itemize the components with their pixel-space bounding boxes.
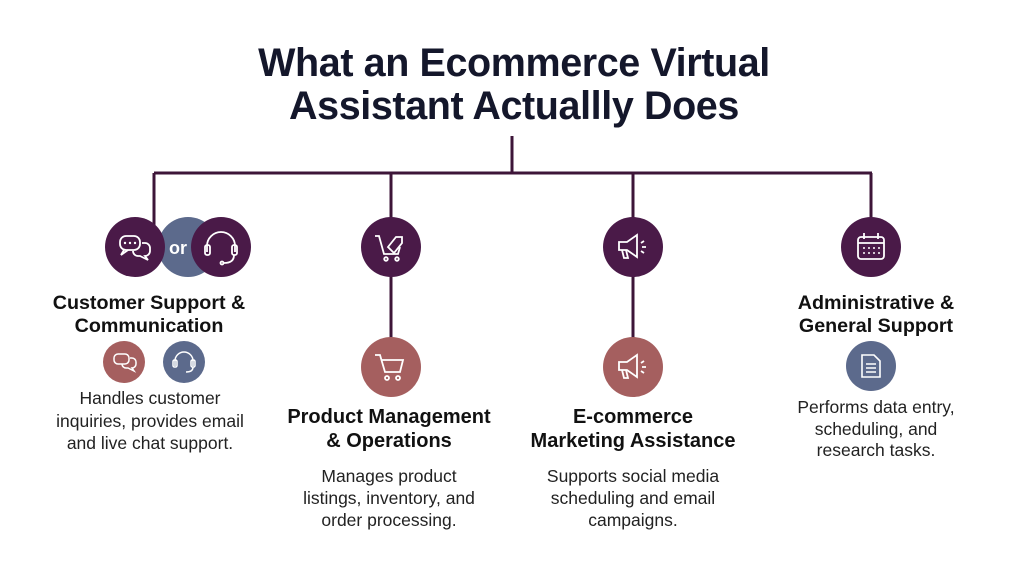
icon: megaphone small — [603, 337, 663, 397]
heading — [287, 406, 491, 452]
panel: administrative — [797, 217, 955, 460]
body text: Performs data entry, — [797, 397, 955, 417]
body text: listings, inventory, and — [303, 488, 475, 508]
icon: calendar — [841, 217, 901, 277]
title: What an Ecommerce Virtual — [258, 41, 770, 85]
heading: E-commerce — [573, 406, 693, 428]
heading — [798, 292, 954, 337]
panel: customer support — [53, 217, 251, 453]
body text: inquiries, provides email — [56, 411, 244, 431]
icon: cart — [361, 337, 421, 397]
body text — [547, 466, 719, 530]
body text: order processing. — [321, 510, 457, 530]
heading: Administrative & — [798, 292, 954, 314]
heading: Customer Support & — [53, 292, 245, 314]
body text — [797, 397, 955, 460]
heading: & Operations — [326, 430, 452, 452]
body text: campaigns. — [588, 510, 678, 530]
heading — [531, 406, 735, 452]
icon: megaphone — [603, 217, 663, 277]
heading: Marketing Assistance — [531, 430, 735, 452]
connector tree — [154, 136, 872, 367]
icon: document — [846, 341, 896, 391]
small icons — [103, 341, 205, 383]
heading — [53, 292, 245, 337]
body text — [56, 388, 244, 453]
heading: Product Management — [287, 406, 491, 428]
body text: research tasks. — [817, 440, 935, 460]
icon: cart tag — [361, 217, 421, 277]
title — [258, 41, 770, 128]
icon: or circle — [158, 217, 218, 277]
icon: headset — [191, 217, 251, 277]
body text: scheduling, and — [815, 419, 937, 439]
panel: marketing — [531, 217, 735, 530]
body text: scheduling and email — [551, 488, 715, 508]
heading: Communication — [75, 315, 223, 337]
body text — [303, 466, 475, 530]
icon: or circle: or — [169, 238, 187, 258]
title: Assistant Actuallly Does — [289, 84, 739, 128]
heading: General Support — [799, 315, 954, 337]
panel: product management — [287, 217, 491, 530]
body text: Supports social media — [547, 466, 719, 486]
body text: and live chat support. — [67, 433, 233, 453]
icon: chat — [105, 217, 165, 277]
body text: Handles customer — [79, 388, 221, 408]
body text: Manages product — [321, 466, 457, 486]
